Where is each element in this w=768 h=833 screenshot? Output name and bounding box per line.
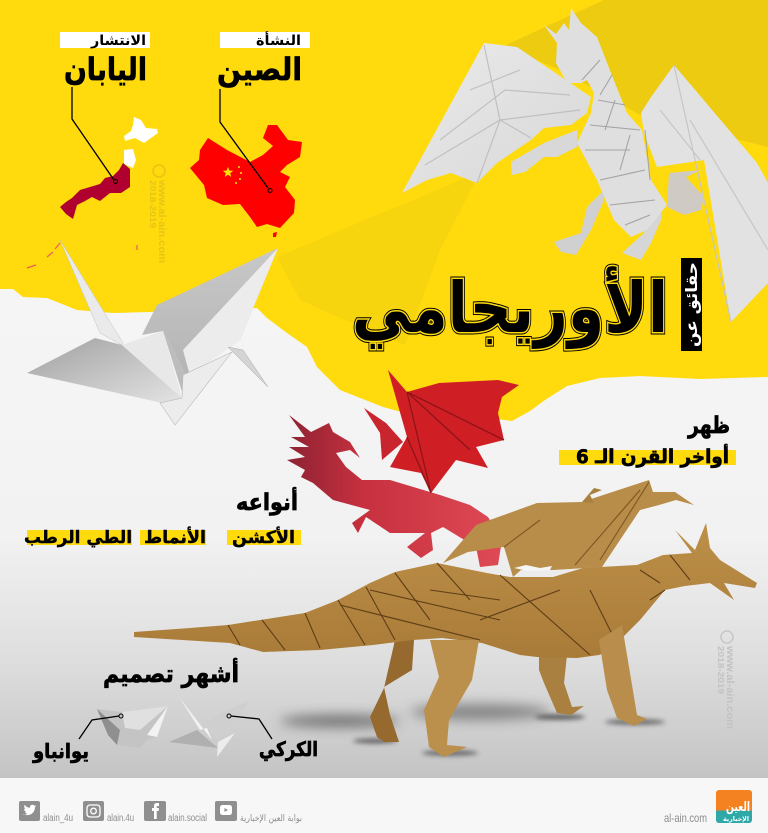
text: website: al-ain.com (664, 811, 707, 825)
label: spread: الانتشار (90, 33, 146, 49)
back wing (364, 408, 403, 460)
yellow shade top right (504, 0, 768, 147)
wing (443, 480, 694, 577)
subtitle tag: حقائق عن (682, 262, 701, 347)
section: types: أنواعه (236, 486, 298, 516)
logo: العين (726, 800, 750, 815)
left wing (27, 338, 182, 404)
fold lines (228, 555, 690, 655)
far front leg (539, 650, 584, 715)
section: types: الطي الرطب (24, 528, 132, 548)
title: الأوريجامي (352, 266, 668, 349)
neck (60, 240, 123, 345)
far rear leg (370, 640, 414, 742)
grey background (0, 240, 768, 778)
icon: small crane (169, 697, 249, 757)
pointer: China (220, 89, 272, 192)
text: instagram handle: alain.4u (107, 813, 134, 824)
watermark left: www.al-ain.com (156, 179, 167, 263)
title: الأوريجامي (352, 266, 668, 349)
right wing (641, 65, 768, 322)
watermark left (148, 165, 167, 263)
white gap (514, 565, 552, 571)
icon: youtube (215, 801, 237, 821)
icon: facebook (144, 801, 166, 821)
pointer: crane (227, 714, 272, 739)
section: appeared: أواخر القرن الـ 6 (576, 444, 729, 468)
front leg (599, 625, 647, 726)
section: appeared: ظهر (687, 413, 730, 439)
yellow shade centre (277, 172, 480, 345)
text: facebook handle: alain.social (168, 813, 207, 824)
pointer: boat (79, 714, 123, 739)
body and tail (134, 523, 757, 658)
hind leg left (554, 190, 604, 255)
front arm (511, 130, 577, 175)
origami crane (27, 240, 278, 425)
section: types (24, 486, 301, 548)
title: الأوريجامي (352, 266, 668, 349)
label: crane: الكركي (259, 737, 318, 762)
label: origin (220, 31, 310, 49)
watermark right (716, 631, 735, 729)
icon: twitter (19, 801, 40, 821)
white origami dragon (402, 8, 768, 322)
brown origami dragon (134, 480, 757, 757)
label: yuanbao: يوانباو (32, 739, 89, 763)
icon: instagram (83, 801, 104, 821)
section: famous designs heading: أشهر تصميم (103, 658, 239, 688)
watermark right: 2018-2019 (716, 646, 725, 695)
icon: yuanbao boat (97, 706, 168, 748)
logo (716, 790, 752, 823)
yellow torn paper header (0, 0, 768, 421)
head (228, 347, 268, 387)
hind leg right (622, 203, 661, 260)
text: twitter handle: alain_4u (43, 813, 73, 824)
heading: Japan: اليابان (64, 52, 147, 88)
pointer: Japan (72, 87, 118, 184)
tail (667, 170, 704, 215)
footer (0, 778, 768, 833)
text: youtube channel: بوابة العين الإخبارية (240, 814, 302, 824)
shadows (280, 704, 665, 756)
watermark right: www.al-ain.com (724, 645, 735, 729)
tail (160, 352, 232, 425)
left wing (402, 43, 591, 193)
label: origin: النشأة (256, 31, 301, 49)
body and head (287, 415, 502, 567)
red origami dragon (287, 370, 519, 567)
front wing (388, 370, 519, 493)
body (122, 331, 182, 398)
map: Japan (27, 117, 158, 268)
label: spread (60, 32, 150, 49)
right wing (142, 248, 278, 377)
watermark left: 2018-2019 (148, 180, 157, 229)
section: types: الأنماط (144, 527, 206, 548)
logo: الإخبارية (723, 815, 749, 823)
section: appeared (559, 413, 736, 468)
map: China (190, 125, 302, 237)
section: types: الأكشن (232, 527, 295, 548)
heading: China: الصين (217, 52, 302, 88)
rear leg (424, 640, 479, 757)
neck and body (544, 8, 667, 237)
